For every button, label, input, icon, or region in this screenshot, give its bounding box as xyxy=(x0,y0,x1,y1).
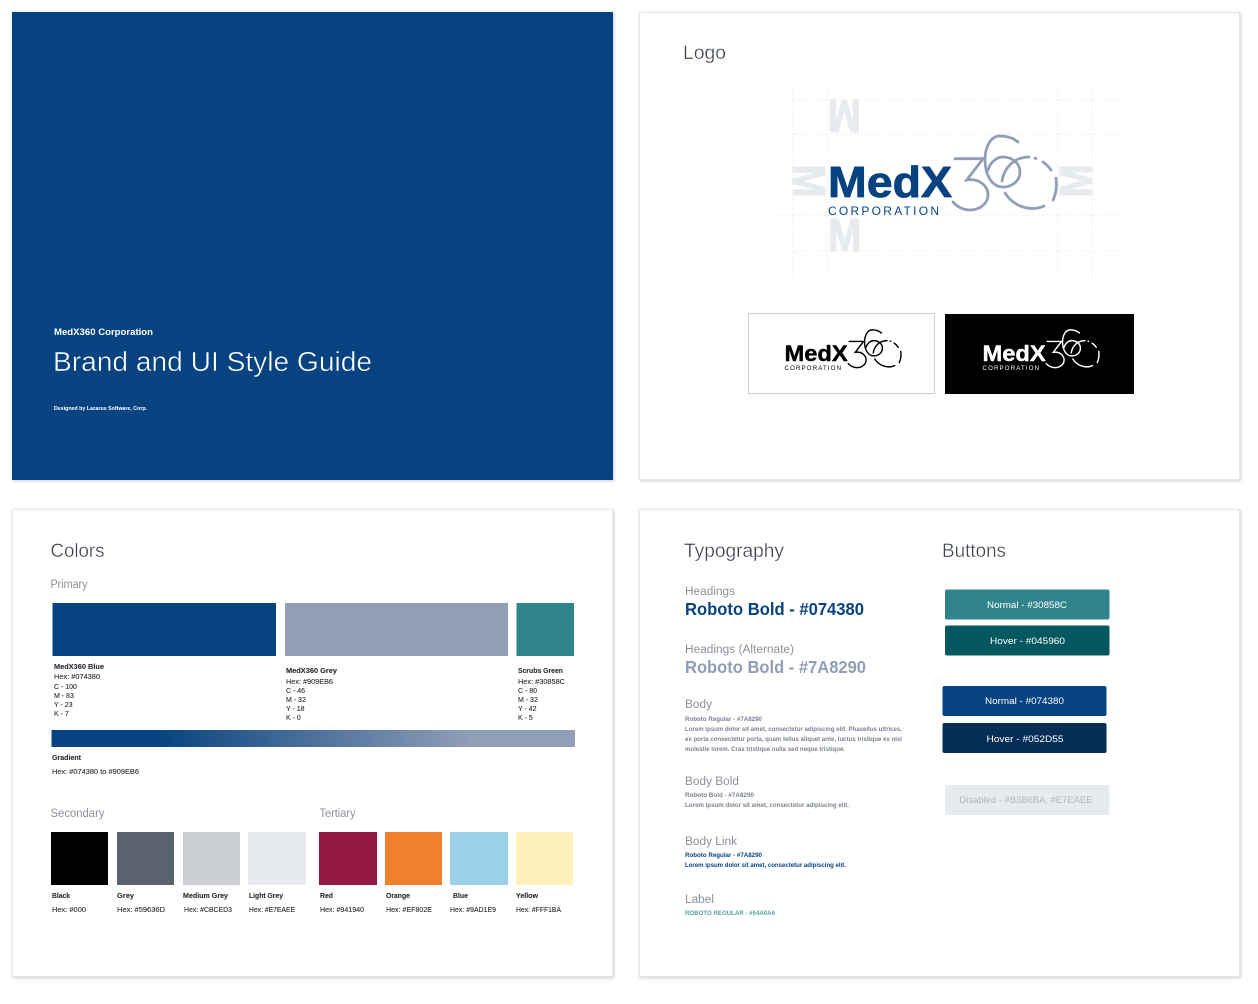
swatch: scrubs green: C - 80 xyxy=(518,688,537,695)
body sample xyxy=(685,699,902,753)
swatch: MedX360 grey xyxy=(285,603,508,722)
button: green normal: Normal - #30858C xyxy=(987,600,1067,611)
body link sample: Roboto Regular - #7A8290 xyxy=(685,852,762,859)
logo on white: CORPORATION xyxy=(784,365,841,372)
body bold sample xyxy=(685,776,849,809)
cover background xyxy=(12,12,613,480)
swatch: grey: Hex: #59636D xyxy=(117,907,165,914)
logo construction grid: M xyxy=(828,89,861,141)
body sample: Roboto Regular - #7A8290 xyxy=(685,716,762,723)
logo on black: CORPORATION xyxy=(982,365,1039,372)
headings sample: Roboto Bold - #074380 xyxy=(685,599,864,619)
colors heading: Colors xyxy=(50,541,104,562)
cover title: Brand and UI Style Guide xyxy=(53,346,372,377)
swatch: MedX360 grey: C - 46 xyxy=(286,688,305,695)
swatch: MedX360 blue: MedX360 Blue xyxy=(54,664,104,671)
swatch: grey: Grey xyxy=(117,893,134,900)
swatch: scrubs green: Hex: #30858C xyxy=(518,679,565,686)
body link sample xyxy=(685,836,846,869)
swatch: black xyxy=(51,832,108,914)
buttons heading: Buttons xyxy=(942,541,1006,562)
logo panel background xyxy=(640,12,1240,480)
colors panel background xyxy=(12,510,612,976)
button: blue hover xyxy=(942,723,1106,753)
panel: typography and buttons xyxy=(640,510,1240,976)
logo on white xyxy=(748,314,934,394)
panel: logo xyxy=(640,12,1240,480)
cover company name: MedX360 Corporation xyxy=(54,327,153,337)
swatch: MedX360 blue: Hex: #074380 xyxy=(54,674,100,681)
label sample xyxy=(685,894,775,917)
logo construction grid: M xyxy=(1051,164,1103,198)
button: disabled xyxy=(945,785,1110,815)
swatch: MedX360 blue: M - 83 xyxy=(54,693,74,700)
primary logo xyxy=(828,136,1056,218)
body sample: molestie lorem. Cras tristique nulla sed neque tristique. xyxy=(685,746,845,753)
body bold sample: Roboto Bold - #7A8290 xyxy=(685,792,754,799)
swatch: MedX360 grey: Y - 18 xyxy=(286,706,305,713)
swatch: yellow: Hex: #FFF1BA xyxy=(516,907,561,914)
swatch: blue: Blue xyxy=(453,893,468,900)
panel: colors xyxy=(12,510,612,976)
logo construction grid: M xyxy=(828,210,861,262)
headings sample xyxy=(685,586,864,619)
logo construction grid: M xyxy=(782,164,834,198)
gradient swatch: Gradient xyxy=(52,755,82,762)
body link sample: Body Link xyxy=(685,836,737,848)
body bold sample: Body Bold xyxy=(685,776,739,788)
swatch: medium grey: Hex: #CBCED3 xyxy=(184,907,232,914)
swatch: MedX360 grey: MedX360 Grey xyxy=(286,668,337,675)
swatch: scrubs green: K - 5 xyxy=(518,715,533,722)
body bold sample: Lorem ipsum dolor sit amet, consectetur adipiscing elit. xyxy=(685,802,849,809)
body sample: ex porta consectetur porta, quam tellus aliquet ante, luctus tristique ex nisl xyxy=(685,736,902,743)
swatch: medium grey: Medium Grey xyxy=(183,893,228,900)
swatch: red: Hex: #941940 xyxy=(320,907,364,914)
logo on black xyxy=(945,314,1134,394)
button: green hover xyxy=(945,626,1110,656)
swatch: black: Hex: #000 xyxy=(52,907,86,914)
gradient swatch xyxy=(52,730,575,776)
swatch: MedX360 grey: K - 0 xyxy=(286,715,301,722)
logo on black: MedX xyxy=(982,341,1046,366)
primary logo: MedX xyxy=(828,158,952,207)
swatch: blue: Hex: #9AD1E9 xyxy=(450,907,496,914)
swatch: scrubs green: M - 32 xyxy=(518,697,538,704)
swatch: MedX360 grey: M - 32 xyxy=(286,697,306,704)
headings sample: Headings xyxy=(685,586,735,598)
panel: cover xyxy=(12,12,613,480)
logo heading: Logo xyxy=(683,43,726,64)
swatch: yellow xyxy=(516,832,573,914)
swatch: black: Black xyxy=(52,893,70,900)
secondary label: Secondary xyxy=(50,808,105,820)
button: disabled: Disabled - #B3B6BA, #E7EAEE xyxy=(960,795,1092,806)
body sample: Body xyxy=(685,699,712,711)
button: green normal xyxy=(945,590,1110,620)
swatch: orange: Hex: #EF802E xyxy=(386,907,432,914)
primary logo: CORPORATION xyxy=(828,204,939,218)
primary label: Primary xyxy=(50,579,88,591)
gradient swatch: Hex: #074380 to #909EB6 xyxy=(52,769,139,776)
swatch: scrubs green: Y - 42 xyxy=(518,706,537,713)
swatch: MedX360 blue: C - 100 xyxy=(54,684,77,691)
cover credit: Designed by Lazarus Software, Corp. xyxy=(54,406,147,412)
swatch: blue xyxy=(450,832,508,914)
button: blue normal xyxy=(942,686,1106,716)
logo on white: MedX xyxy=(784,341,848,366)
swatch: orange: Orange xyxy=(386,893,410,900)
swatch: medium grey xyxy=(183,832,240,914)
swatch: red: Red xyxy=(320,893,333,900)
button: blue normal: Normal - #074380 xyxy=(985,696,1064,707)
swatch: light grey: Hex: #E7EAEE xyxy=(249,907,295,914)
swatch: red xyxy=(319,832,377,914)
swatch: MedX360 blue: K - 7 xyxy=(54,711,69,718)
logo construction grid xyxy=(780,85,1122,280)
alternate headings sample: Roboto Bold - #7A8290 xyxy=(685,657,866,677)
label sample: ROBOTO REGULAR - #54A0A6 xyxy=(685,910,775,917)
button: blue hover: Hover - #052D55 xyxy=(986,734,1064,745)
body sample: Lorem ipsum dolor sit amet, consectetur adipiscing elit. Phasellus ultrices, xyxy=(685,726,902,733)
swatch: light grey xyxy=(248,832,306,914)
swatch: yellow: Yellow xyxy=(516,893,539,900)
swatch: scrubs green xyxy=(516,603,574,722)
typography panel background xyxy=(640,510,1240,976)
button: green hover: Hover - #045960 xyxy=(990,636,1065,647)
swatch: light grey: Light Grey xyxy=(249,893,283,900)
swatch: scrubs green: Scrubs Green xyxy=(518,668,563,675)
swatch: MedX360 blue: Y - 23 xyxy=(54,702,73,709)
swatch: grey xyxy=(117,832,174,914)
alternate headings sample xyxy=(685,644,866,677)
swatch: MedX360 grey: Hex: #909EB6 xyxy=(286,679,333,686)
swatch: MedX360 blue xyxy=(52,603,276,718)
swatch: orange xyxy=(385,832,442,914)
label sample: Label xyxy=(685,894,714,906)
alternate headings sample: Headings (Alternate) xyxy=(685,644,794,656)
body link sample: Lorem ipsum dolor sit amet, consectetur adipiscing elit. xyxy=(685,862,846,869)
tertiary label: Tertiary xyxy=(320,808,356,820)
typography heading: Typography xyxy=(684,541,784,562)
